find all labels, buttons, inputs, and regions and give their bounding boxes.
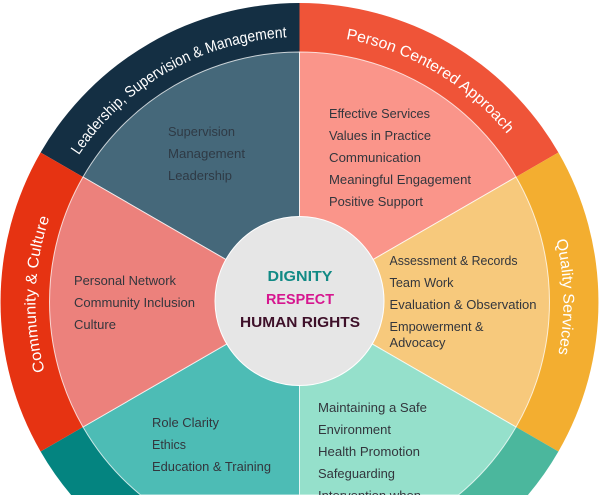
list: Quality Services topics: [390, 254, 537, 350]
list: Person Centered topics: Effective Services: [329, 107, 430, 121]
heading: Respect: RESPECT: [266, 292, 334, 308]
list: Person Centered topics: Positive Support: [329, 195, 424, 209]
list: green topics: [318, 401, 427, 495]
panel: teal topics: [83, 302, 300, 495]
list: green topics: Environment: [318, 423, 392, 437]
list: teal topics: [152, 416, 271, 474]
list: Leadership topics: Management: [168, 147, 246, 161]
band: Person Centered Approach: [300, 3, 558, 177]
band: teal, lower left: [41, 302, 299, 495]
list: green topics: Health Promotion: [318, 445, 420, 459]
list: Quality Services topics: Team Work: [390, 276, 454, 290]
heading: Dignity: DIGNITY: [268, 269, 333, 285]
panel: Quality Services topics: [300, 177, 549, 427]
list: teal topics: Ethics: [152, 438, 186, 452]
label: Person Centered Approach: Person Centered Approach: [347, 28, 512, 134]
list: Person Centered topics: Values in Practice: [329, 129, 431, 143]
panel: Person Centered topics: [300, 52, 516, 302]
list: Leadership topics: Supervision: [168, 125, 235, 139]
list: Community & Culture topics: Culture: [74, 318, 116, 332]
label: Quality Services: Quality Services: [555, 239, 574, 354]
list: Person Centered topics: Meaningful Engagement: [329, 173, 472, 187]
band: green, lower right: [300, 302, 558, 495]
list: teal topics: Role Clarity: [152, 416, 220, 430]
panel: green topics: [300, 302, 516, 495]
list: green topics: Safeguarding: [318, 467, 395, 481]
center hub: [215, 216, 384, 386]
label: Leadership, Supervision & Management: Leadership, Supervision & Management: [70, 27, 287, 154]
panel: Community & Culture topics: [50, 177, 300, 427]
list: Community & Culture topics: [74, 274, 195, 332]
list: Person Centered topics: Communication: [329, 151, 421, 165]
band: Leadership, Supervision & Management: [40, 3, 300, 177]
label: Community & Culture: Community & Culture: [24, 216, 48, 372]
list: Quality Services topics: Evaluation & Observation: [390, 298, 537, 312]
list: Person Centered topics: [329, 107, 472, 209]
list: Leadership topics: Leadership: [168, 169, 232, 183]
panel: Leadership topics: [83, 52, 300, 302]
list: Quality Services topics: Empowerment &: [390, 320, 484, 334]
list: Community & Culture topics: Community Inclusion: [74, 296, 195, 310]
list: Leadership topics: [168, 125, 246, 183]
list: teal topics: Education & Training: [152, 460, 271, 474]
list: Quality Services topics: Assessment & Records: [390, 254, 518, 268]
list: Community & Culture topics: Personal Network: [74, 274, 177, 288]
list: green topics: Maintaining a Safe: [318, 401, 427, 415]
list: Quality Services topics: Advocacy: [390, 336, 446, 350]
heading: Human Rights: HUMAN RIGHTS: [240, 315, 360, 331]
